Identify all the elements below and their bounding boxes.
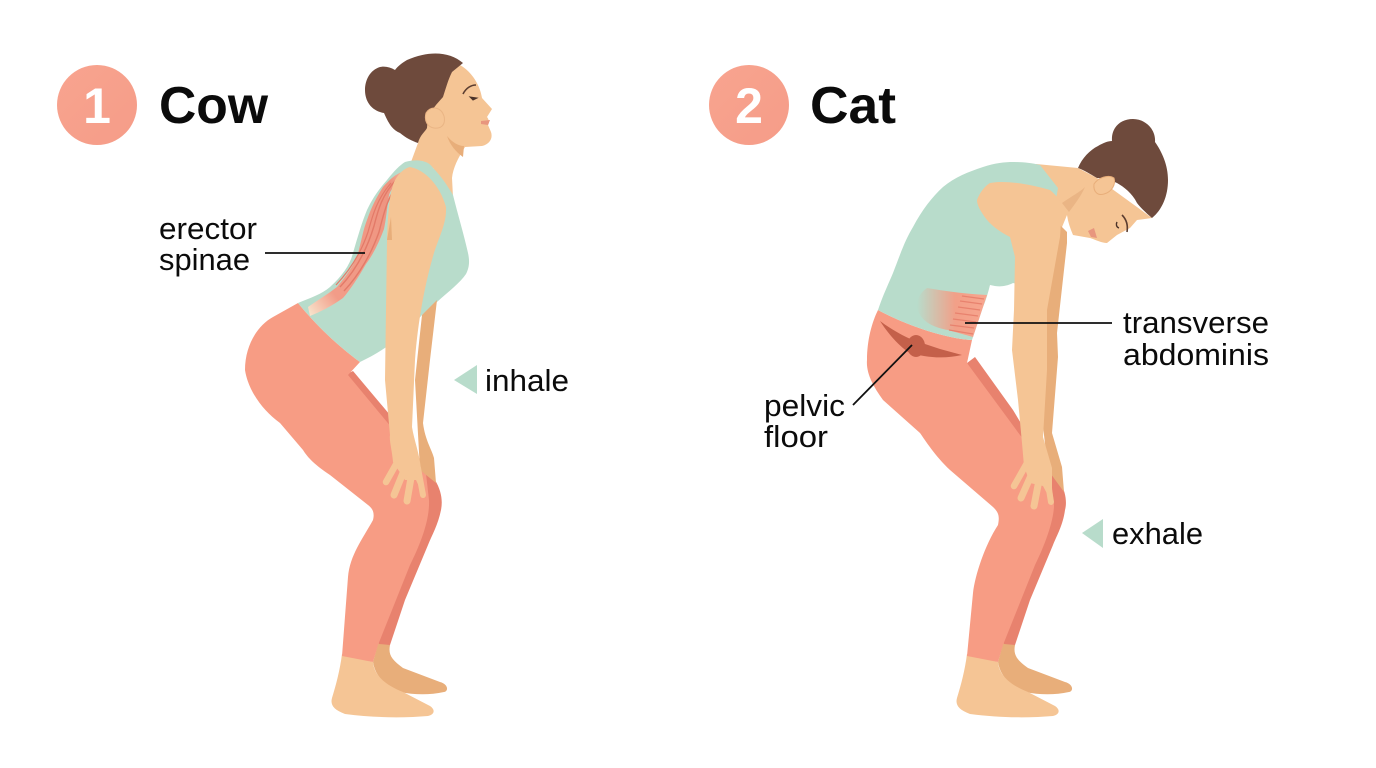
front foot — [332, 654, 434, 717]
back arm — [415, 300, 437, 483]
label: pelvic floor — [764, 345, 912, 454]
tank top — [878, 162, 1058, 340]
leggings — [867, 310, 1054, 662]
label: pelvic floor: pelvic — [764, 388, 845, 423]
hair — [365, 54, 463, 143]
arrow and label: inhale: inhale — [485, 363, 569, 398]
figure: woman in cat pose — [867, 119, 1168, 717]
front arm and hand — [977, 182, 1062, 506]
heading: cow: 1 — [83, 78, 111, 134]
leggings — [245, 303, 429, 662]
label: erector spinae — [159, 211, 365, 277]
label: pelvic floor: floor — [764, 419, 828, 454]
label: transverse abdominis — [965, 305, 1269, 372]
back arm — [1040, 225, 1067, 492]
label: transverse abdominis: transverse — [1123, 305, 1269, 340]
label: erector spinae: spinae — [159, 242, 250, 277]
hair — [1078, 119, 1168, 218]
ear — [1094, 176, 1115, 195]
neck and face — [1036, 164, 1152, 243]
arrow and label: exhale: exhale — [1112, 516, 1203, 551]
neck and face — [411, 65, 492, 197]
label: erector spinae: erector — [159, 211, 257, 246]
pelvic floor muscle — [880, 321, 962, 357]
back foot — [998, 640, 1072, 694]
back leg — [345, 371, 442, 645]
front arm and hand — [385, 167, 446, 501]
facial details — [1088, 215, 1127, 238]
panel: cat pose — [709, 65, 1269, 717]
heading: cow — [57, 65, 269, 145]
back foot — [373, 640, 447, 694]
back leg — [967, 357, 1066, 645]
heading: cat — [709, 65, 896, 145]
transverse abdominis muscle — [917, 288, 987, 337]
heading: cat: 2 — [735, 78, 763, 134]
heading: cow: Cow — [159, 77, 269, 135]
heading: cat: Cat — [810, 77, 896, 135]
label: transverse abdominis: abdominis — [1123, 337, 1269, 372]
facial details — [463, 85, 490, 125]
neck shadow — [1062, 187, 1085, 212]
figure: woman in cow pose — [245, 54, 492, 717]
neck shadow — [447, 136, 464, 157]
ear — [425, 108, 444, 128]
front foot — [957, 654, 1059, 717]
panel: cow pose — [57, 54, 569, 717]
tank top — [298, 160, 469, 362]
erector spinae muscle — [308, 172, 415, 316]
